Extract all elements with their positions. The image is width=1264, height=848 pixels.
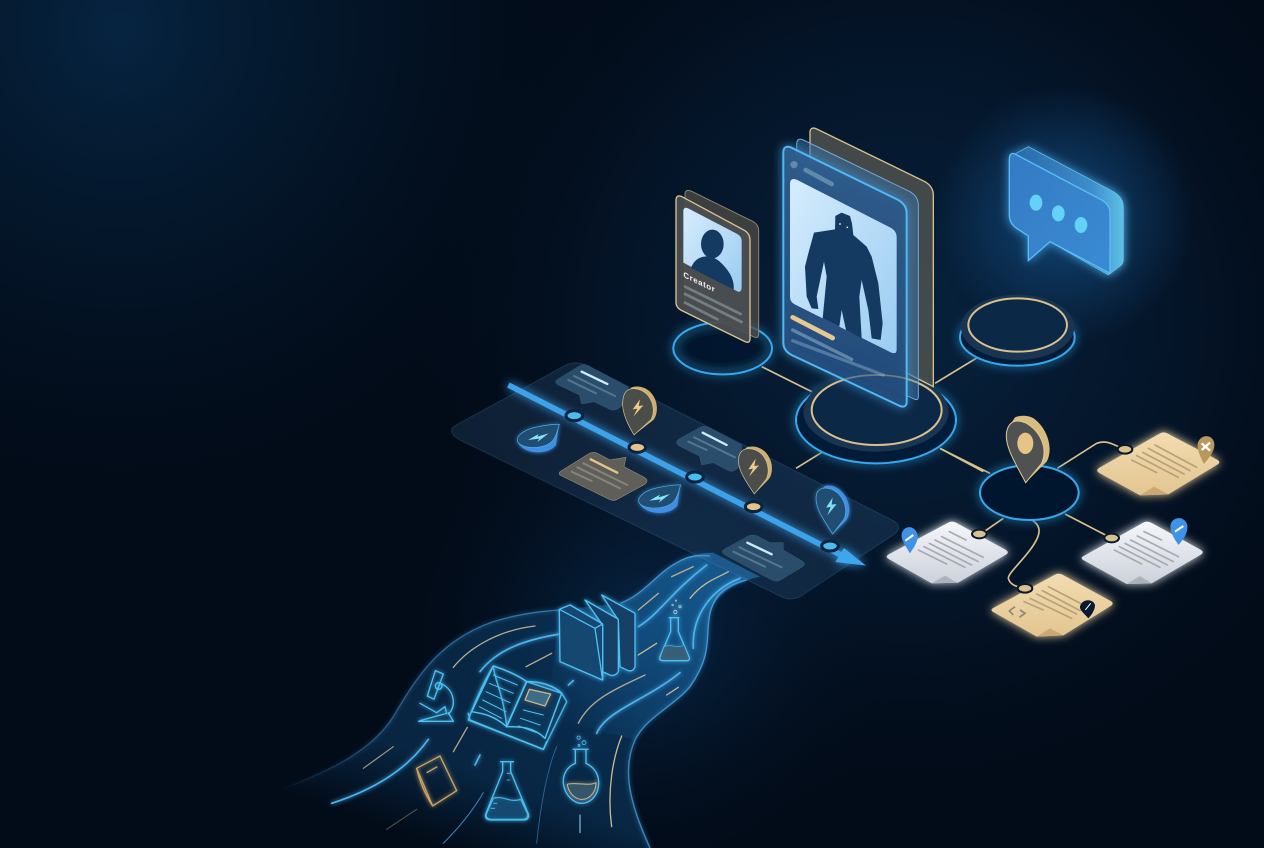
portrait: [683, 208, 742, 292]
icon: gold pin 1: [623, 386, 657, 435]
hub rings and connectors: [673, 295, 1075, 472]
figure image: [790, 179, 897, 353]
platform surface: [451, 363, 899, 599]
chat bubble: [1009, 147, 1123, 275]
header dot and bar: [790, 161, 832, 184]
river body: [273, 553, 760, 848]
main profile card stack: [783, 128, 942, 410]
hub ring: [980, 465, 1079, 520]
icon: open book: [468, 666, 567, 749]
knowledge river with research icons: [273, 553, 760, 848]
timeline events: [508, 365, 866, 581]
connectors: [762, 356, 983, 472]
icon: dark pin: [1080, 600, 1095, 618]
connector node: [1104, 534, 1119, 542]
ring overlap: [812, 375, 942, 410]
ring: creator: [673, 322, 772, 374]
timeline platform: [451, 363, 899, 599]
connector node: [1018, 584, 1032, 593]
faint and gold flow lines: [363, 567, 728, 843]
creator card: [676, 190, 759, 342]
text lines: [685, 287, 742, 322]
message bubble 1: [556, 365, 628, 410]
connectors: [940, 442, 1125, 588]
icon: blue pin: [902, 527, 918, 553]
back sheet: [685, 190, 759, 337]
river edges: [280, 556, 747, 848]
document: white right: [1082, 518, 1203, 584]
connector node: [972, 530, 987, 538]
message bubble 4: [722, 535, 804, 581]
creator label: Creator: [683, 269, 715, 295]
silhouette figure: [805, 213, 883, 340]
caption lines: [793, 317, 883, 375]
typing dots: [1030, 195, 1087, 233]
message bubble 2: [677, 426, 742, 471]
icon: water drop 2: [639, 485, 681, 513]
timeline arrow: [508, 385, 866, 566]
icon: microscope: [419, 671, 453, 721]
document: gold top: [1097, 432, 1219, 495]
icon: blue pin: [1170, 518, 1187, 545]
icon: conical flask: [485, 762, 529, 820]
icon: gold pin cross: [1198, 436, 1214, 464]
icon: gold pin 2: [738, 446, 772, 494]
icon: blue pin: [816, 486, 849, 534]
document network: [887, 416, 1219, 637]
front sheet: [676, 196, 750, 342]
icon: hub pin: [1006, 416, 1050, 483]
bubble face: [1009, 153, 1110, 273]
icon: books: [559, 595, 635, 680]
icon: small flask: [660, 600, 689, 661]
code symbol: [1009, 607, 1025, 617]
message bubble gold: [559, 452, 647, 500]
icon: gold book: [417, 756, 457, 806]
connector node: [1118, 445, 1132, 454]
document: gold bottom: [991, 574, 1113, 637]
figure eyes: [839, 223, 848, 228]
front sheet: [783, 147, 907, 407]
blue flow lines: [332, 565, 740, 803]
document: white left: [887, 522, 1008, 583]
bubble depth: [1015, 147, 1123, 275]
ring: hub main: [796, 372, 956, 463]
icon: round flask: [563, 736, 599, 803]
back gold sheet: [810, 128, 933, 387]
ring: chat platform: [960, 295, 1075, 366]
timeline nodes: [566, 411, 838, 551]
icon: water drop 1: [517, 424, 559, 452]
middle sheet: [797, 139, 918, 400]
